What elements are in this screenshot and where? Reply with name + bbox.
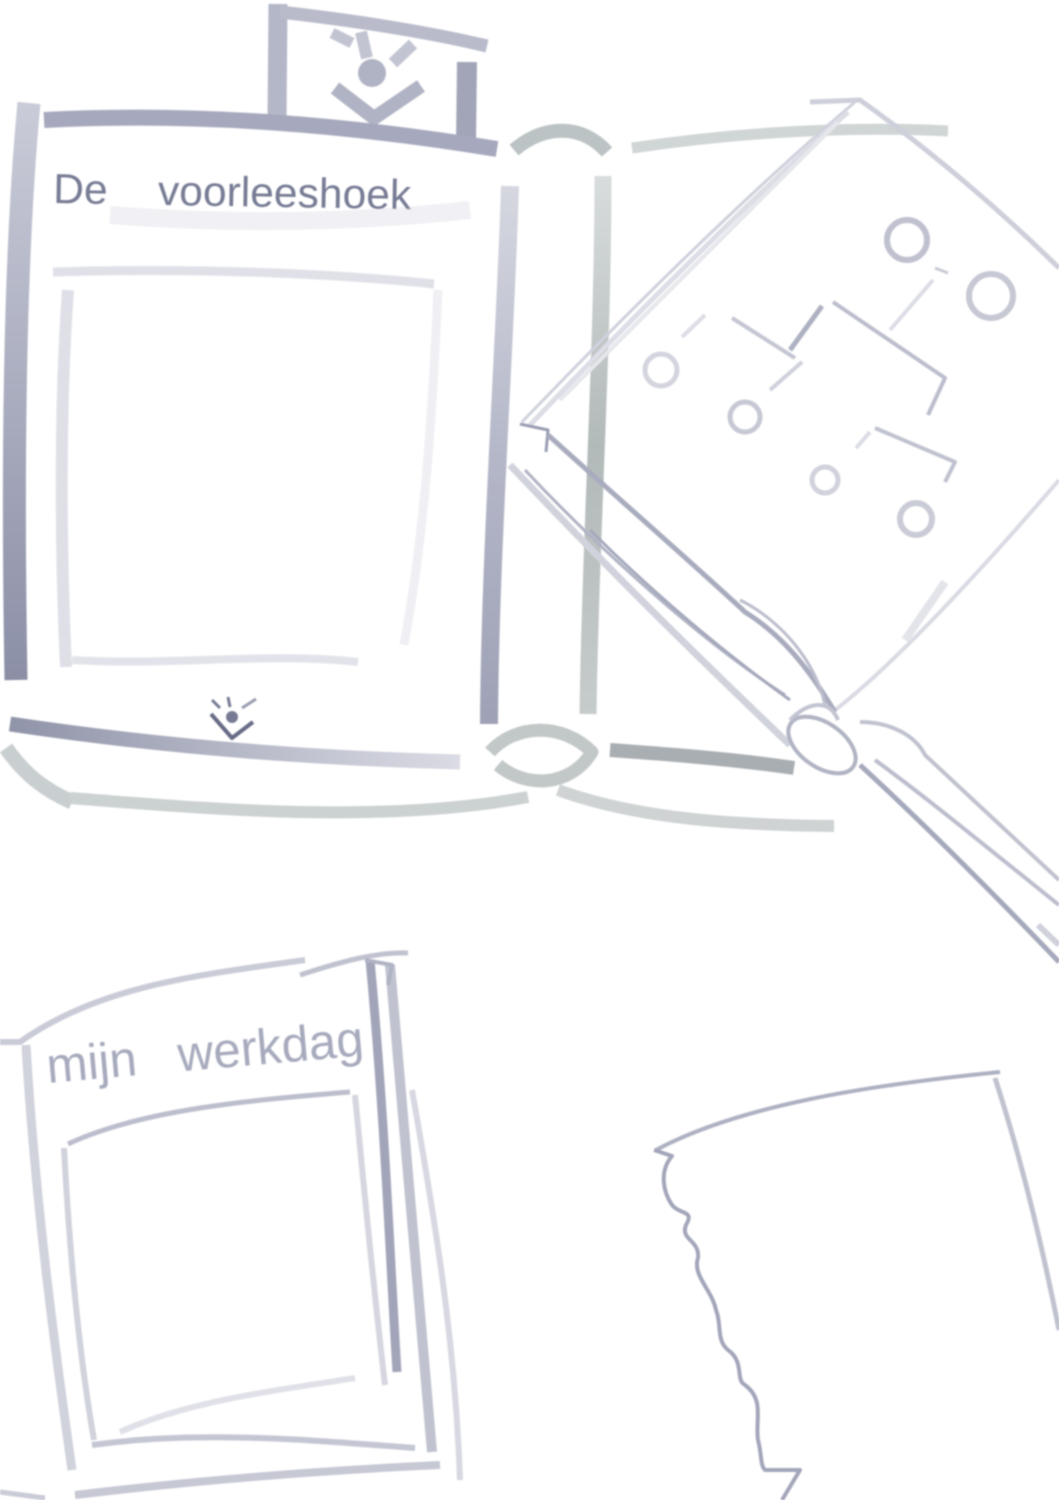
icon: eye logo large (332, 32, 421, 118)
torn edge (654, 1150, 800, 1500)
worksheet: mijn werkdag (0, 953, 460, 1498)
heading: De voorleeshoek: De voorleeshoek (53, 165, 413, 218)
open book (6, 4, 948, 826)
sheet outline (0, 953, 460, 1498)
picture frame on worksheet (64, 1092, 385, 1440)
bookmark tab with logo (277, 4, 487, 142)
board outline (520, 100, 1059, 710)
heading: mijn werkdag: mijn werkdag (44, 1010, 366, 1094)
pointer board with diagram (510, 100, 1059, 962)
spine and right page (490, 129, 948, 826)
left page outline (6, 103, 528, 812)
icon: eye logo small (211, 697, 256, 738)
org diagram (645, 220, 1013, 535)
picture frame on left page (53, 270, 438, 667)
torn paper sheet (654, 1072, 1059, 1500)
ghost text behind heading (110, 210, 470, 221)
handle of pointer (510, 435, 1059, 962)
